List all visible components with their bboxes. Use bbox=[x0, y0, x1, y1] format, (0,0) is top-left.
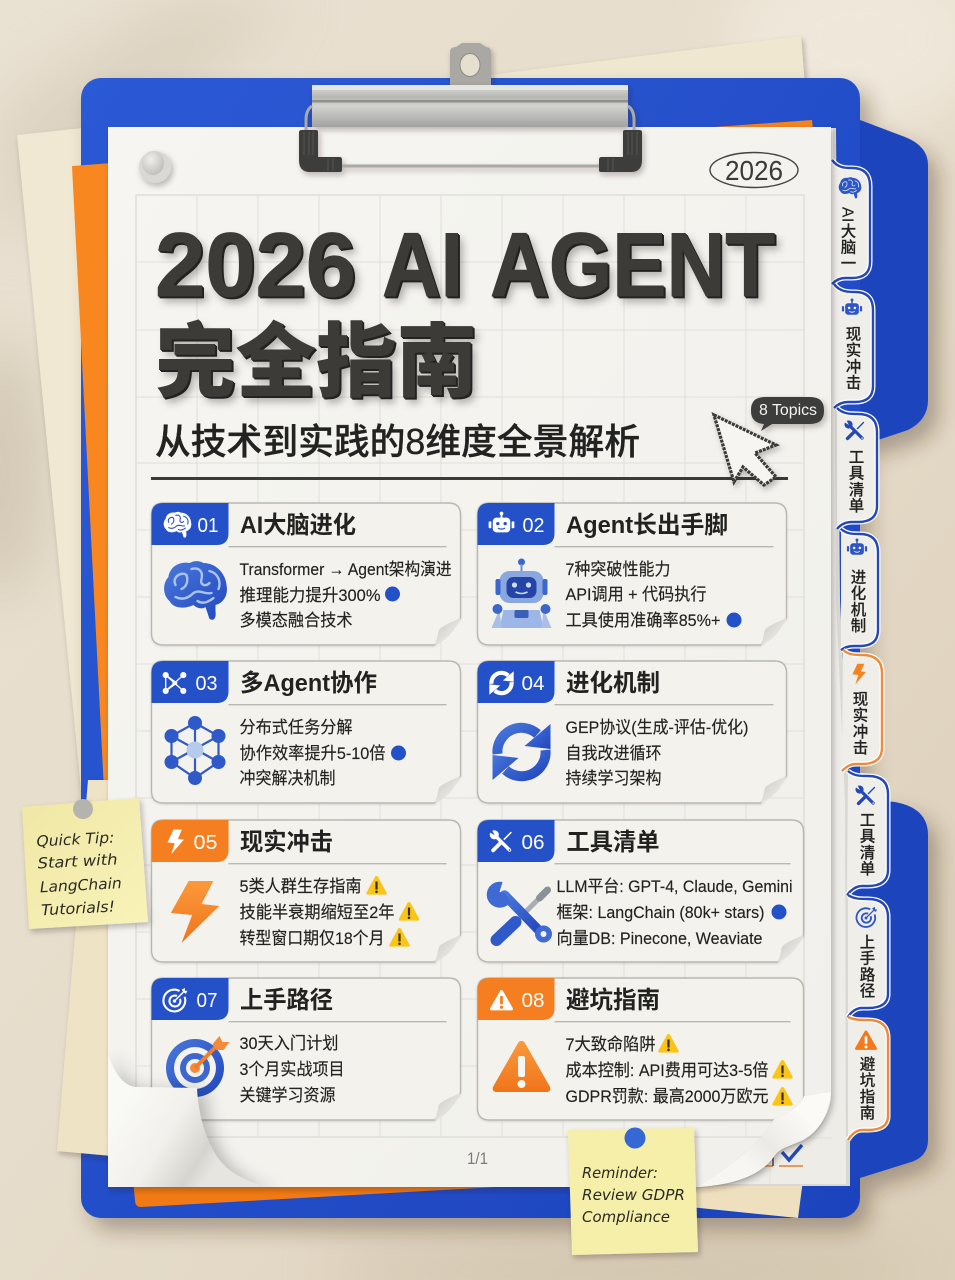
back sheet: cream paper top bbox=[450, 36, 806, 100]
tab 8: 避坑指南: 避坑指南 bbox=[858, 1056, 875, 1120]
card 07: 30天入门计划 bbox=[240, 1034, 338, 1053]
card 06: 框架: LangChain (80k+ stars) bbox=[556, 903, 764, 922]
icon: tools bbox=[487, 882, 552, 942]
card 08 bbox=[478, 978, 804, 1120]
card 06: 06 bbox=[522, 832, 544, 854]
note text: Review GDPR bbox=[582, 1186, 685, 1204]
card 03: 冲突解决机制 bbox=[240, 769, 336, 788]
title: AI bbox=[382, 215, 463, 316]
metal clip tab bbox=[450, 43, 491, 85]
note text: Tutorials! bbox=[41, 897, 115, 919]
tab 1: AI大脑 bbox=[832, 160, 870, 284]
card 04: 进化机制 bbox=[566, 670, 660, 697]
card 05: 现实冲击 bbox=[240, 829, 333, 856]
card 06 bbox=[478, 820, 804, 962]
card 06: LLM平台: GPT-4, Claude, Gemini bbox=[556, 877, 792, 896]
card 03 bbox=[152, 661, 460, 803]
card 08: 成本控制: API费用可达3-5倍 bbox=[566, 1061, 768, 1080]
card 06: 工具清单 bbox=[566, 829, 660, 856]
card 01: Transformer → Agent架构演进 bbox=[240, 560, 452, 579]
card 04 bbox=[478, 661, 786, 803]
tab 6: 工具清单 bbox=[847, 771, 888, 895]
title rule bbox=[151, 477, 788, 480]
card 08: 避坑指南 bbox=[566, 987, 660, 1014]
back sheet: cream paper left bbox=[17, 124, 120, 800]
sticky note: quick tip bbox=[22, 798, 148, 929]
tab 7: 上手路径 bbox=[848, 895, 888, 1017]
tab 2: 现实冲击 bbox=[834, 284, 873, 408]
card 01: 推理能力提升300% bbox=[240, 586, 380, 605]
card 05: 5类人群生存指南 bbox=[240, 877, 362, 896]
card 02: Agent长出手脚 bbox=[566, 512, 728, 539]
card 02: API调用 + 代码执行 bbox=[566, 585, 706, 604]
check mark on under-sheet bbox=[758, 1145, 803, 1166]
grid bbox=[136, 195, 804, 1137]
card 03: 协作效率提升5-10倍 bbox=[240, 744, 386, 763]
clip bar bbox=[312, 85, 628, 127]
note text: Reminder: bbox=[582, 1164, 658, 1182]
card 05: 技能半衰期缩短至2年 bbox=[240, 903, 394, 922]
card 07: 3个月实战项目 bbox=[240, 1060, 344, 1079]
card 02 bbox=[478, 503, 786, 645]
card 07: 上手路径 bbox=[240, 987, 333, 1014]
page curl: bottom left bbox=[107, 1052, 270, 1188]
orange folder peeking: top bbox=[700, 120, 813, 130]
card 02: 工具使用准确率85%+ bbox=[566, 610, 721, 630]
card 08: GDPR罚款: 最高2000万欧元 bbox=[566, 1087, 768, 1106]
clip wire bbox=[306, 106, 634, 166]
card 04: 持续学习架构 bbox=[566, 769, 662, 788]
subtitle: 从技术到实践的8维度全景解析 bbox=[155, 421, 640, 462]
card 04: 自我改进循环 bbox=[566, 744, 662, 763]
card 01: AI大脑进化 bbox=[240, 512, 356, 539]
card 01: 多模态融合技术 bbox=[240, 611, 352, 630]
note pin bbox=[73, 799, 93, 819]
clipboard: blue board with side lobes bbox=[81, 78, 928, 1218]
clipboard clip bbox=[299, 85, 642, 172]
page number: 1/1 bbox=[467, 1149, 488, 1168]
card 05 bbox=[152, 820, 460, 962]
card 08: 08 bbox=[522, 990, 544, 1012]
note text bbox=[582, 1164, 685, 1226]
note text: Compliance bbox=[582, 1208, 670, 1226]
cream sheet: lower right bbox=[680, 1180, 803, 1218]
card 02: 02 bbox=[522, 515, 544, 537]
title: 2026 bbox=[155, 215, 356, 316]
title bbox=[155, 215, 775, 414]
tab 6: 工具清单: 工具清单 bbox=[858, 812, 875, 876]
side tabs bbox=[832, 160, 888, 1140]
tab 3: 工具清单 bbox=[837, 408, 877, 529]
card 07 bbox=[152, 978, 460, 1120]
note text bbox=[36, 828, 123, 919]
note pin bbox=[624, 1128, 646, 1148]
card 05: 转型窗口期仅18个月 bbox=[240, 929, 384, 948]
card 04: GEP协议(生成-评估-优化) bbox=[566, 718, 748, 737]
tab 3: 工具清单: 工具清单 bbox=[846, 449, 864, 513]
page curl: bottom right bbox=[697, 1092, 831, 1187]
card 01 bbox=[152, 503, 460, 645]
tab 5: 现实冲击 orange bbox=[842, 650, 882, 771]
cursor icon bbox=[714, 415, 776, 485]
card 03: 分布式任务分解 bbox=[240, 718, 352, 737]
card 01: 01 bbox=[198, 515, 218, 537]
card 08: 7大致命陷阱 bbox=[566, 1035, 656, 1054]
year badge bbox=[710, 152, 798, 188]
icon: network bbox=[164, 716, 226, 785]
card 03: 多Agent协作 bbox=[240, 670, 377, 697]
tab 8: 避坑指南 bbox=[848, 1017, 888, 1140]
cream sheet: lower left bbox=[57, 780, 112, 1156]
card 05: 05 bbox=[194, 832, 218, 854]
icon: robot bbox=[492, 558, 552, 628]
title: 完全指南 bbox=[155, 297, 477, 414]
note text: Quick Tip: bbox=[36, 828, 115, 850]
sheet stack under the page bbox=[108, 128, 850, 1186]
card 04: 04 bbox=[522, 673, 544, 695]
note text: Start with bbox=[37, 850, 118, 872]
tab 5: 现实冲击 orange: 现实冲击 bbox=[850, 691, 868, 755]
orange folder peeking: bottom bbox=[133, 1180, 620, 1207]
8 Topics bubble bbox=[751, 397, 824, 431]
tab 7: 上手路径: 上手路径 bbox=[858, 934, 875, 998]
sticky note: reminder bbox=[568, 1128, 698, 1255]
card 07: 关键学习资源 bbox=[240, 1086, 336, 1105]
tab 4: 进化机制 bbox=[841, 529, 878, 650]
clip handles bbox=[299, 130, 642, 172]
push pin bbox=[139, 151, 171, 183]
tab 4: 进化机制: 进化机制 bbox=[848, 569, 866, 633]
year badge: 2026 bbox=[725, 155, 783, 186]
tab 1: AI大脑: AI大脑一 bbox=[838, 207, 856, 271]
main paper page bbox=[108, 127, 831, 1187]
card 07: 07 bbox=[196, 990, 218, 1012]
card 03: 03 bbox=[196, 673, 218, 695]
icon: target bbox=[166, 1036, 230, 1097]
card 02: 7种突破性能力 bbox=[566, 560, 670, 579]
8 Topics bubble: 8 Topics bbox=[759, 402, 817, 419]
card 06: 向量DB: Pinecone, Weaviate bbox=[556, 929, 762, 948]
title: AGENT bbox=[490, 215, 775, 316]
orange folder peeking: left bbox=[72, 163, 112, 790]
note text: LangChain bbox=[39, 874, 122, 896]
tab 2: 现实冲击: 现实冲击 bbox=[844, 326, 861, 390]
